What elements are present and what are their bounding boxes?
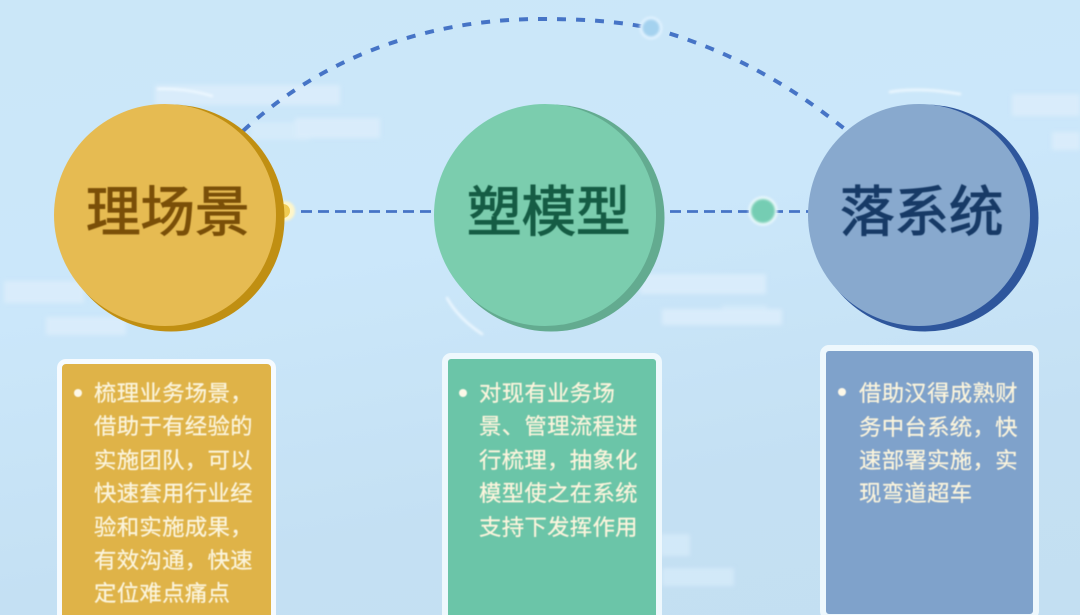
text: 理场景 description: 定位难点痛点 <box>94 581 230 606</box>
text: 塑模型 description: 行梳理，抽象化 <box>479 448 638 473</box>
node: yellow behind circle <box>275 201 295 221</box>
text: 理场景 description: 快速套用行业经 <box>94 481 253 506</box>
heading: 塑模型: 塑模型 <box>467 182 631 243</box>
node: light blue on arc <box>640 16 662 40</box>
circle: yellow <box>54 104 284 332</box>
heading: 落系统: 落系统 <box>840 182 1004 243</box>
text: 理场景 description: 验和实施成果， <box>94 515 253 540</box>
text: 落系统 description: 现弯道超车 <box>859 481 972 506</box>
panel: 理场景 card <box>57 359 276 615</box>
bullet <box>459 389 467 397</box>
panel: 落系统 card <box>820 345 1039 615</box>
text: 落系统 description: 务中台系统，快 <box>859 415 1018 440</box>
arc connector dashed <box>243 19 846 131</box>
text: 落系统 description <box>858 381 1018 506</box>
text: 塑模型 description: 支持下发挥作用 <box>479 515 638 540</box>
text: 理场景 description: 实施团队，可以 <box>94 448 253 473</box>
text: 理场景 description: 梳理业务场景， <box>94 381 253 406</box>
text: 落系统 description: 借助汉得成熟财 <box>859 381 1018 406</box>
text: 塑模型 description: 景、管理流程进 <box>479 414 638 439</box>
text: 塑模型 description <box>479 381 638 540</box>
text: 塑模型 description: 对现有业务场 <box>479 381 615 406</box>
text: 落系统 description: 速部署实施，实 <box>859 448 1018 473</box>
text: 理场景 description <box>94 381 253 606</box>
circle: green <box>434 104 664 332</box>
bullet <box>838 388 846 396</box>
node: green on line <box>748 196 778 226</box>
bullet <box>74 389 82 397</box>
panel: 塑模型 card <box>442 353 662 615</box>
text: 理场景 description: 借助于有经验的 <box>94 414 253 439</box>
heading: 理场景: 理场景 <box>86 182 250 243</box>
horizontal connector: yellow to green <box>301 210 434 213</box>
decorative arcs <box>158 89 960 334</box>
horizontal connector: green to blue <box>670 210 809 213</box>
circle: blue <box>808 104 1038 332</box>
text: 塑模型 description: 模型使之在系统 <box>479 481 638 506</box>
text: 理场景 description: 有效沟通，快速 <box>94 548 253 573</box>
